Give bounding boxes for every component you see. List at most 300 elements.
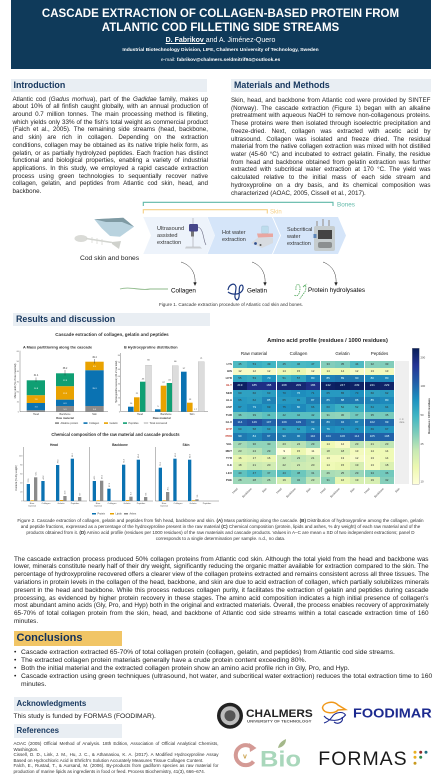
amino acid row labels: GLU [226, 420, 232, 424]
heatmap: gelatin: 23 [355, 442, 358, 446]
chart C: chemical composition panels: material [160, 504, 168, 508]
list: conclusions: Cascade extraction extracted 65-70% of total collagen protein (collagen, gelatin, and peptides) from Atlantic cod side streams. [21, 649, 395, 656]
heatmap: gelatin: 19 [355, 478, 358, 482]
chart B: hydroxyproline distribution [115, 346, 208, 420]
caption: figure 2: Figure 2. Cascade extraction of collagen, gelatin and peptides from fish head, backbone and skin. (A) Mass partitioning along the cascade. (B) Distribution of hydroxyproline among the collagen, gelatin [17, 518, 424, 523]
text: materials and methods [231, 97, 430, 197]
heading: results and discussion [13, 313, 210, 326]
heatmap: collagen: 90 [297, 434, 300, 438]
heatmap: peptides: 229 [384, 383, 389, 387]
chart B: hydroxyproline distribution: 43 [142, 378, 145, 380]
panel: skin: 73.6 [160, 461, 162, 466]
chart A: mass partitioning: 8.5 [93, 366, 97, 368]
list: conclusions: • [14, 649, 16, 656]
text: materials and methods: characterized (AOAC, 2005, Cissell et al., 2017). [231, 190, 366, 197]
heatmap: raw material: 36 [238, 413, 242, 417]
text: references [14, 741, 218, 774]
heatmap: collagen: 71 [311, 391, 314, 395]
heatmap: collagen: 109 [296, 420, 301, 424]
legend: chart C [92, 512, 137, 516]
heading: acknowledgments [14, 696, 122, 710]
icon: collagen strand [120, 288, 168, 289]
text: references: AOAC (2005) Official Method of Analysis. 18th Edition, Association of Official Analytical Chemists, [14, 741, 218, 746]
heatmap: collagen: 15 [297, 449, 300, 453]
heatmap: raw material: 17 [253, 456, 256, 460]
chart A: mass partitioning: Backbone [59, 413, 71, 416]
heatmap: collagen: 43 [282, 471, 286, 475]
heatmap: peptides: 108 [384, 434, 389, 438]
chart B: hydroxyproline distribution: B Hydroxyproline distribution [124, 346, 178, 350]
chart B: hydroxyproline distribution: 66 [174, 361, 177, 363]
icon: hot plate [251, 226, 273, 248]
heatmap: collagen: 47 [311, 362, 314, 366]
chart A: mass partitioning: Mass yield (% of raw material) [13, 364, 17, 398]
heatmap: collagen: 186 [310, 383, 315, 387]
no data column: n.d. [400, 418, 404, 421]
heatmap: gelatin: 12 [355, 456, 358, 460]
chart A: mass partitioning: 10 [17, 402, 20, 404]
heatmap: collagen: 87 [311, 398, 314, 402]
heatmap: gelatin: 31 [326, 413, 330, 417]
text: materials and methods: hydroxyproline on a dry basis, and its chemical composition was [231, 182, 430, 189]
text: results discussion: variations in protein levels in the collagen of the head, backbone, and skin are due to acid extraction of collagen, which partially solubilizes minerals [14, 579, 429, 586]
text: results discussion: 65-70% of total collagen protein from the skin, head, and backbone of Atlantic cod side streams within a total cascade extraction time of 160 [14, 610, 428, 617]
chart B: hydroxyproline distribution: Raw material [153, 416, 171, 420]
amino acid row labels: PHE [226, 478, 232, 482]
amino acid row labels: GLY [226, 383, 232, 387]
heatmap: collagen: 70 [282, 391, 286, 395]
heatmap: raw material: 84 [253, 434, 256, 438]
heatmap: collagen: 76 [297, 391, 300, 395]
heatmap: raw material: 65 [238, 398, 242, 402]
heatmap: gelatin: 88 [355, 398, 358, 402]
icon: subcritical reactor [314, 219, 335, 251]
chart A: mass partitioning: 5.3 [63, 409, 67, 411]
heatmap: gelatin: 65 [326, 391, 330, 395]
heatmap: collagen: 66 [311, 405, 314, 409]
heatmap: raw material: 79 [253, 405, 256, 409]
text: results discussion: percentage of hydroxyproline recovered offers a clearer view of the collagen proteins extracted and remains consistent across all three tissues. The [14, 571, 429, 578]
text: materials and methods: ultrasound. Collagen was isolated and freeze dried. The residual [231, 136, 430, 143]
bars: head [27, 380, 45, 412]
logo: foodimar [322, 702, 432, 724]
logo: cbio [234, 739, 301, 770]
sample labels: Skin [394, 487, 401, 494]
heading: conclusions: Conclusions [16, 632, 83, 644]
chart C: chemical composition panels: Content (% dry weight) [15, 465, 18, 491]
text: materials and methods: freeze-dried. Next, collagen was extracted with acetic acid by [231, 128, 430, 135]
list: conclusions: • [14, 657, 16, 664]
panel: head: 44.2 [43, 475, 45, 480]
chart B: hydroxyproline distribution: 70 [118, 362, 121, 364]
heatmap: collagen: 9 [283, 449, 285, 453]
chart A: mass partitioning: Head [33, 413, 40, 416]
heatmap: gelatin: 19 [355, 463, 358, 467]
heatmap: gelatin: 90 [355, 376, 358, 380]
heatmap: gelatin: 14 [341, 369, 344, 373]
chart A: mass partitioning: 50 [17, 361, 20, 363]
text: materials and methods: (Norway). The cascade extraction (Figure 1) began with an alkaline [231, 105, 430, 112]
amino acid row labels: THR [226, 413, 232, 417]
text: references: Falch, E., Rustad, T., & Aursand, M. (2006). By-products from gadiform species as raw material for [14, 763, 218, 768]
heatmap: peptides: 102 [370, 420, 375, 424]
heatmap: raw material: 60 [238, 391, 242, 395]
heatmap: collagen: 208 [282, 383, 287, 387]
colour scale: 200 [420, 356, 426, 360]
panel: skin: 20.1 [168, 486, 170, 490]
heatmap: peptides: 67 [385, 427, 388, 431]
chart C: chemical composition panels: 60 [20, 474, 23, 476]
panel: skin: 93.0 [175, 452, 177, 457]
legend: chart A and B: Peptides [128, 421, 139, 425]
heatmap: gelatin: 87 [355, 420, 358, 424]
heatmap: raw material [233, 361, 276, 484]
heatmap: collagen: 38 [297, 471, 300, 475]
amino acid row labels: SER [226, 391, 232, 395]
chart C: chemical composition panels: Collagen [174, 503, 183, 505]
heading: materials and methods: Materials and Methods [234, 80, 330, 90]
chart C: chemical composition panels: material [28, 504, 36, 508]
heatmap: gelatin: 242 [326, 383, 331, 387]
text: references: Cissell, D. D., Link, J. M., Hu, J. C., & Athanasiou, K. A. (2017). A Modified Hydroxyproline Assay [14, 752, 218, 757]
heatmap: peptides: 13 [371, 369, 374, 373]
heatmap: peptides: 69 [371, 427, 374, 431]
chart C: chemical composition panels: Gelatin [190, 502, 197, 505]
chart B: hydroxyproline distribution: 71 [200, 358, 203, 360]
chart A: mass partitioning: 13.3 [63, 393, 68, 395]
text: introduction: (Falch et al., 2005). The remaining side streams (head, backbone, [12, 126, 208, 133]
heatmap: gelatin: 114 [354, 434, 359, 438]
heatmap: peptides: 99 [385, 420, 388, 424]
chart B: hydroxyproline distribution: 5 [157, 406, 159, 408]
heatmap: peptides: 13 [385, 369, 388, 373]
heatmap: gelatin: 85 [326, 376, 330, 380]
chart B: hydroxyproline distribution: 40 [118, 384, 121, 386]
caption: figure 1: Figure 1. Cascade extraction procedure of Atlantic cod skin and bones. [159, 302, 303, 307]
chart B: hydroxyproline distribution: 60 [118, 369, 121, 371]
heatmap: collagen: 31 [311, 471, 314, 475]
chart C: chemical composition panels: Peptides [203, 502, 212, 505]
heatmap: peptides [365, 361, 394, 484]
chart B: hydroxyproline distribution: 57 [183, 368, 186, 370]
panel: head: 37.9 [28, 478, 30, 482]
panel: skin: Skin [183, 443, 189, 447]
heatmap: gelatin: 247 [340, 383, 345, 387]
heatmap: gelatin: 52 [355, 405, 358, 409]
chart A: mass partitioning: 14.8 [34, 388, 39, 390]
sample labels: Backbone [373, 487, 385, 499]
heatmap: raw material: 58 [253, 427, 256, 431]
heatmap: raw material: 97 [267, 434, 270, 438]
heatmap: gelatin: 106 [340, 434, 345, 438]
group labels [241, 351, 388, 356]
heatmap: collagen: 109 [282, 420, 287, 424]
heatmap: gelatin: 104 [326, 434, 331, 438]
list: conclusions: minutes. [21, 681, 46, 688]
heatmap: collagen: 32 [297, 478, 300, 482]
heatmap: raw material: 12 [253, 369, 256, 373]
panel: backbone: Backbone [112, 443, 128, 447]
bars: backbone [56, 373, 74, 412]
heatmap: gelatin: 35 [341, 362, 344, 366]
heatmap: peptides: 80 [385, 376, 388, 380]
heatmap: raw material: 21 [253, 463, 256, 467]
heatmap: gelatin: 89 [326, 420, 330, 424]
text: funding: This study is funded by FORMAS (FOODIMAR). [14, 712, 156, 720]
heatmap: raw material: 27 [238, 442, 242, 446]
affiliation: Industrial Biotechnology Division, LIFE, Chalmers University of Technology, Sweden [122, 48, 319, 53]
chart A: mass partitioning: 20 [17, 392, 20, 394]
heatmap: peptides: 13 [371, 456, 374, 460]
heatmap: peptides: 80 [385, 398, 388, 402]
panel: skin [155, 443, 219, 501]
chart B: hydroxyproline distribution: 1.7 [194, 409, 198, 411]
heatmap: raw material: 23 [238, 449, 242, 453]
legend: chart A and B: Alkaline protein [60, 421, 79, 425]
amino acid row labels: PRO [225, 434, 232, 438]
text: materials and methods: pretreatment with aqueous NaOH to remove non-collagenous proteins. [231, 112, 430, 119]
chart A: mass partitioning: 7.8 [34, 399, 38, 401]
panel: head: 10.6 [64, 490, 66, 494]
heatmap: collagen: 80 [297, 405, 300, 409]
heatmap: raw material: 53 [253, 376, 256, 380]
arrow: gelatin [252, 262, 266, 286]
text: results discussion: minutes. [14, 618, 38, 625]
heatmap: collagen: 22 [282, 456, 286, 460]
caption: figure 2 [17, 518, 424, 541]
step: hot water: Hot water [222, 230, 246, 236]
chart B: hydroxyproline distribution: Skin [190, 413, 195, 416]
heatmap: raw material: 129 [252, 420, 257, 424]
chart C: chemical composition panels: 40 [20, 482, 23, 484]
heatmap: raw material: 12 [238, 369, 242, 373]
chart C: chemical composition panels: Gelatin [58, 502, 65, 505]
chart C: chemical composition panels: Peptides [137, 502, 146, 505]
heatmap: raw material: 85 [267, 398, 270, 402]
group labels: Gelatin [335, 351, 350, 356]
step: hot water [208, 217, 280, 254]
heatmap: collagen: 51 [282, 376, 286, 380]
text: introduction: gelatin, or as partially hydrolyzed peptides. Each fraction has distinct [12, 150, 208, 157]
heatmap: gelatin: 18 [326, 449, 330, 453]
heatmap: collagen: 57 [297, 376, 300, 380]
text: materials and methods: Skin, head, and backbone from Atlantic cod were provided by SINTEF [231, 97, 430, 104]
amino acid row labels: TYR [226, 456, 232, 460]
heatmap: peptides: 241 [370, 383, 375, 387]
sample labels: Backbone [285, 487, 297, 499]
label: protein hydrolysates: Protein hydrolysates [308, 287, 365, 294]
heatmap: collagen: 19 [282, 478, 286, 482]
heatmap: collagen: 20 [311, 463, 314, 467]
chart C: chemical composition panels: Raw [30, 503, 35, 505]
chart A: mass partitioning: 40 [17, 371, 20, 373]
heatmap: collagen: 46 [297, 362, 300, 366]
heatmap: raw material: 55 [238, 376, 242, 380]
chart B: hydroxyproline distribution: Hydroxyproline recovery (% of raw total) [115, 361, 118, 403]
heatmap: peptides: 80 [371, 376, 374, 380]
text: introduction: process using green technologies to sequentially recover native [12, 173, 208, 180]
heatmap: collagen: 21 [297, 463, 300, 467]
chart A: mass partitioning: 7.3 [34, 406, 38, 408]
heatmap: gelatin: 85 [326, 398, 330, 402]
chart D: amino acid profile heatmap [225, 338, 431, 499]
panel: backbone [89, 443, 153, 501]
logo: chalmers: UNIVERSITY OF TECHNOLOGY [247, 719, 312, 723]
chart A: mass partitioning: 30 [17, 382, 20, 384]
step: ultrasound [143, 217, 215, 254]
heatmap: gelatin: 52 [341, 405, 344, 409]
chart A: mass partitioning: Skin [92, 413, 98, 416]
heatmap: gelatin: 89 [341, 376, 344, 380]
text: results discussion: present in the head and backbone. While this process reduces collagen purity, it facilitates the extraction of gelatin and peptides during cascade [14, 587, 428, 594]
chart C: chemical composition panels: Gelatin [124, 502, 131, 505]
heatmap: gelatin: 76 [326, 427, 330, 431]
heatmap: gelatin: 25 [341, 471, 344, 475]
list: conclusions: Cascade extraction using green techniques (ultrasound, hot water, and subcritical water extraction) reduces the total extraction time to 160 [21, 673, 432, 680]
text: materials and methods: water (45-60 °C) and incubated to extract gelatin. Finally, the residue [231, 151, 430, 158]
amino acid row labels: HIS [227, 369, 232, 373]
logo: foodimar: FOODIMAR [353, 706, 432, 720]
heatmap: peptides: 21 [371, 442, 374, 446]
group labels: Raw material [241, 351, 267, 356]
heatmap: raw material: 49 [267, 362, 270, 366]
chart C: chemical composition panels [15, 443, 219, 508]
heatmap: peptides: 64 [385, 405, 388, 409]
title banner [10, 0, 430, 69]
text: introduction: about 10% of all finfish caught globally, with an annual production of [12, 103, 208, 110]
chart B: hydroxyproline distribution: 41 [168, 380, 171, 382]
panel: head: 92.1 [72, 452, 74, 457]
panel: backbone: 9.3 [130, 491, 132, 495]
text: materials and methods: calculated relative to the initial mass of each side stream and [231, 174, 430, 181]
text: materials and methods: material from the native collagen extraction was mixed with hot distilled [231, 143, 430, 150]
legend: chart C: Lipids [116, 513, 123, 516]
bones bracket: Bones [337, 202, 355, 208]
heatmap: peptides: 14 [385, 449, 388, 453]
amino acid row labels: ALA [226, 398, 232, 402]
heatmap: gelatin: 33 [326, 362, 330, 366]
colour scale: Residues / 1000 residues [427, 398, 431, 434]
icon: gelatin coil [228, 284, 243, 300]
heatmap: raw material: 107 [266, 420, 271, 424]
step: ultrasound: Ultrasound [157, 226, 184, 232]
heatmap: peptides: 32 [385, 478, 388, 482]
heatmap: collagen: 23 [282, 442, 286, 446]
heatmap: gelatin: 44 [355, 362, 358, 366]
heatmap: peptides: 32 [371, 362, 374, 366]
chart A: mass partitioning: Raw material [56, 416, 74, 420]
chart A: mass partitioning: 5.6 [93, 409, 97, 411]
poster title: CASCADE EXTRACTION OF COLLAGEN-BASED PROTEIN FROM [42, 8, 399, 20]
heading: results and discussion: Results and discussion [16, 314, 115, 324]
sample labels: Head [275, 487, 283, 494]
heatmap: peptides: 105 [370, 434, 375, 438]
heading: acknowledgments: Acknowledgments [16, 698, 86, 708]
sample labels: Head [363, 487, 371, 494]
chart B: hydroxyproline distribution: 13 [189, 399, 192, 401]
heatmap: raw material: 24 [253, 449, 256, 453]
chart A: mass partitioning [13, 346, 108, 420]
amino acid row labels: VAL [226, 442, 232, 446]
chart B: hydroxyproline distribution: Backbone [160, 413, 172, 416]
heatmap: collagen: 42 [282, 413, 286, 417]
heatmap: collagen: 90 [282, 434, 286, 438]
heatmap: raw material: 67 [238, 405, 242, 409]
text: introduction: functional and biological properties, enabling a variety of industrial [12, 157, 208, 164]
step: subcritical: extraction [287, 241, 311, 247]
text: materials and methods: These proteins were then isolated through isoelectric precipitation and [231, 120, 430, 127]
panel: head: 52.1 [36, 471, 38, 476]
heatmap: peptides: 85 [371, 398, 374, 402]
legend: chart A and B [55, 421, 168, 425]
heatmap: collagen: 15 [297, 369, 300, 373]
chart A: mass partitioning: 12.9 [63, 380, 68, 382]
heatmap: collagen: 61 [282, 427, 286, 431]
chart A: mass partitioning: 35.3 [92, 388, 97, 390]
heatmap: gelatin: 14 [326, 369, 330, 373]
colour scale: 25 [420, 442, 424, 446]
icon: hydrolysate peptides [294, 284, 307, 299]
text: results discussion: most abundant amino acids (Gly, Pro, and Hyp) both in the original and extracted materials. Overall, the process enables recovery of approximately [14, 602, 429, 609]
chart B: hydroxyproline distribution: 20 [118, 398, 121, 400]
text: results discussion [14, 556, 429, 625]
bones bracket [143, 202, 355, 208]
chart A: mass partitioning: 38.2 [63, 368, 68, 370]
chart A: mass partitioning: 0 [18, 412, 20, 414]
chart C: chemical composition panels: Collagen [42, 503, 51, 505]
heatmap: collagen: 62 [297, 427, 300, 431]
logo: chalmers: CHALMERS [246, 708, 313, 720]
heatmap: collagen: 93 [311, 420, 314, 424]
heatmap: raw material: 28 [253, 478, 256, 482]
heatmap: gelatin: 94 [341, 420, 344, 424]
chart B: hydroxyproline distribution: 50 [118, 376, 121, 378]
text: introduction [12, 96, 208, 195]
heatmap: collagen: 21 [311, 456, 314, 460]
heatmap: gelatin: 14 [326, 463, 330, 467]
heading: introduction [10, 79, 207, 92]
arrow: protein hydrolysates [323, 262, 337, 286]
heatmap: collagen: 22 [282, 463, 286, 467]
sample labels: Skin [261, 487, 268, 494]
heatmap: raw material: 16 [267, 456, 270, 460]
heatmap: collagen [277, 361, 320, 484]
legend: chart C: Protein [98, 513, 106, 516]
text: introduction: and skin) are rich in collagen. Depending on the extraction [12, 134, 208, 141]
legend: chart A and B: Collagen [89, 421, 100, 425]
authors: D. Fabrikov and A. Jiménez-Quero [166, 37, 275, 44]
heatmap: raw material: 29 [267, 449, 270, 453]
heatmap: gelatin [321, 361, 364, 484]
heatmap: peptides: 14 [385, 456, 388, 460]
heatmap: raw material: 16 [238, 456, 242, 460]
label: collagen: Collagen [171, 288, 196, 294]
heatmap: raw material: 90 [238, 434, 242, 438]
skin bracket: Skin [270, 210, 282, 216]
heatmap: collagen: 24 [297, 442, 300, 446]
heatmap: peptides: 18 [385, 463, 388, 467]
heatmap: peptides: 34 [371, 471, 374, 475]
step: subcritical: Subcritical [287, 227, 312, 233]
chart A: mass partitioning: A Mass partitioning along the cascade [23, 346, 92, 350]
heatmap: peptides: 35 [385, 413, 388, 417]
heatmap: raw material: 70 [267, 376, 270, 380]
step: subcritical: water [286, 234, 301, 240]
colour scale: 10 [420, 480, 424, 484]
heatmap: collagen: 110 [310, 434, 315, 438]
heatmap: collagen: 14 [282, 369, 286, 373]
chart C: chemical composition panels: 100 [19, 456, 23, 458]
